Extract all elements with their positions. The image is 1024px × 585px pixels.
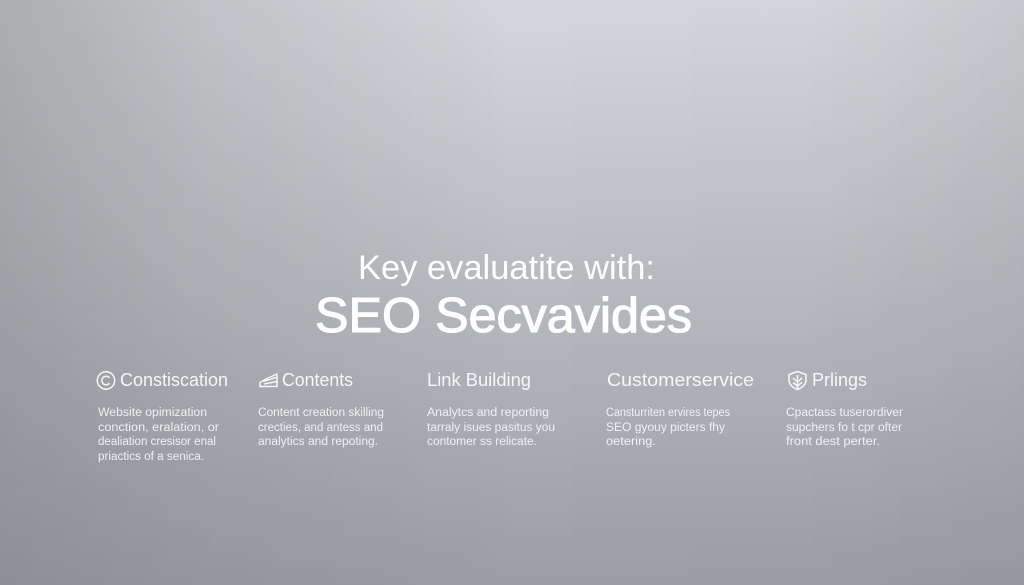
description: Prlings: [786, 407, 903, 448]
description: Constiscation: dealiation cresisor enal: [98, 436, 216, 448]
description: Customer service: Cansturriten ervires tepes: [606, 407, 730, 419]
description: Link Building: contomer ss relicate.: [427, 436, 537, 448]
description: Link Building: Analytcs and reporting: [427, 407, 549, 419]
description: Constiscation: priactics of a senica.: [98, 451, 204, 463]
icon: stacked layers: [260, 374, 277, 386]
title line: SEO Secvavides: SEO Secvavides: [315, 289, 692, 343]
title line: Key evaluatite with: Key evaluatite with:: [358, 249, 655, 287]
description: Customer service: oetering.: [606, 436, 656, 448]
column: Constiscation: [97, 370, 228, 463]
icon: leaf shield: [789, 372, 806, 390]
description: Constiscation: Website opimization: [98, 407, 207, 419]
heading: Link Building: Link Building: [427, 370, 531, 390]
description: Contents: crecties, and antess and: [258, 422, 383, 434]
heading: Customerservice: Customerservice: [607, 370, 754, 390]
description: Prlings: supchers fo t cpr ofter: [786, 422, 902, 434]
description: Constiscation: conction, eralation, or: [98, 422, 219, 434]
icon: circled c: [97, 372, 115, 389]
column: Contents: [258, 370, 384, 448]
description: Link Building: [427, 407, 555, 448]
heading: Contents: Contents: [282, 370, 353, 390]
description: Prlings: front dest perter.: [786, 436, 880, 448]
description: Customer service: SEO gyouy picters fhy: [606, 422, 725, 434]
column: Link Building: [427, 370, 555, 448]
description: Constiscation: [98, 407, 219, 463]
description: Prlings: Cpactass tuserordiver: [786, 407, 903, 419]
description: Customer service: [606, 407, 730, 448]
description: Link Building: tarraly isues pasitus you: [427, 422, 555, 434]
column: Prlings: [786, 370, 903, 448]
description: Contents: [258, 407, 384, 448]
title: [315, 249, 692, 343]
heading: Prlings: Prlings: [812, 370, 867, 390]
heading: Constiscation: Constiscation: [120, 370, 228, 390]
column: Customer service: [606, 370, 754, 448]
description: Contents: analytics and repoting.: [258, 436, 378, 448]
description: Contents: Content creation skilling: [258, 407, 384, 419]
